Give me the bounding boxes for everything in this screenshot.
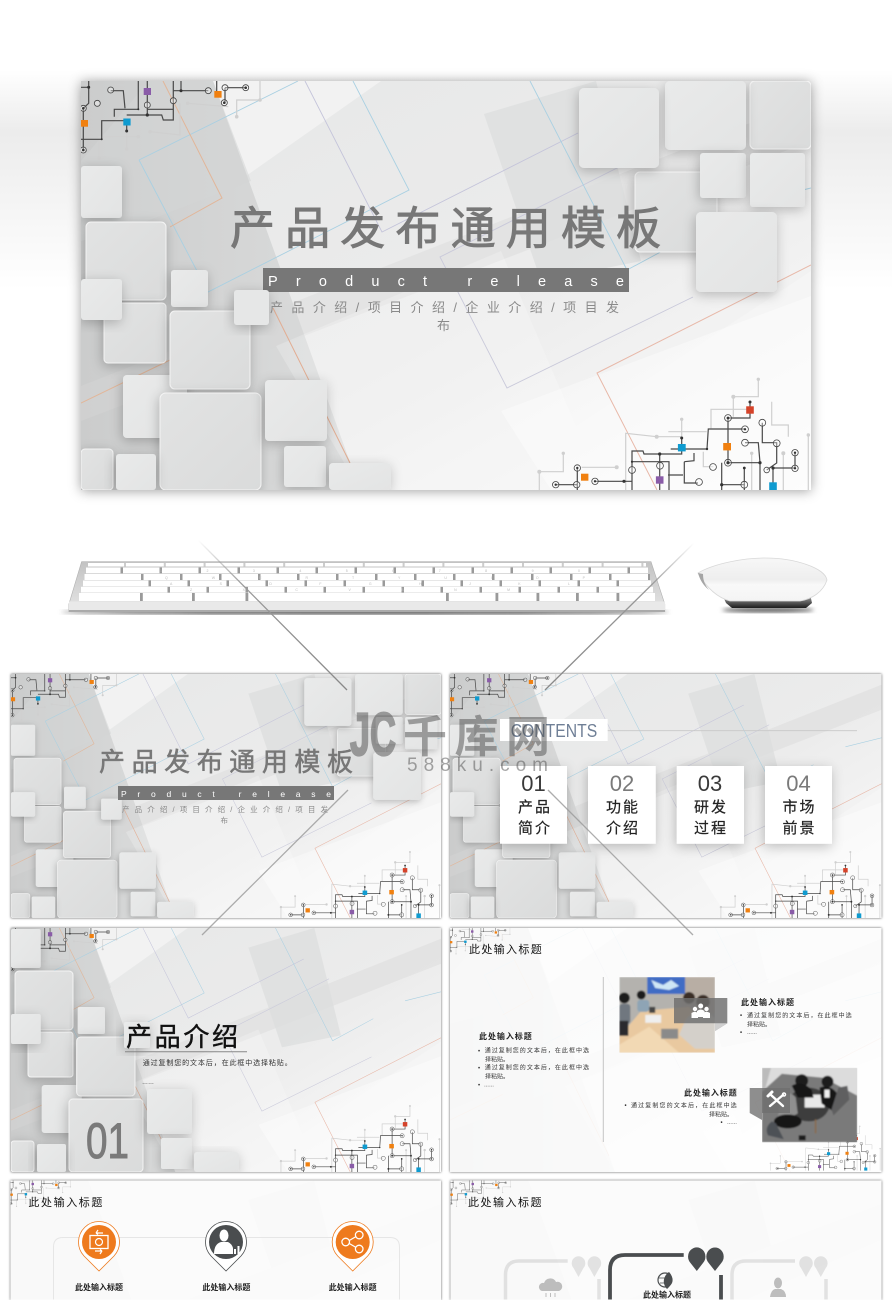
left text block: • [478,1049,480,1055]
key legends [160,569,586,592]
panel: main slide [80,81,811,490]
key legends: A S D F G H J K L [170,582,570,586]
left text block: 通过复制您的文本后，在此框中选 [485,1064,589,1072]
right lower text block [624,1088,737,1126]
key legends: 1 2 3 4 5 6 7 8 9 0 [160,569,580,573]
keyboard [61,562,669,614]
title: 产品发布通用模板 [230,203,661,254]
card 04: 04 [786,771,811,796]
pin: orange money [78,1222,120,1271]
subtitle bar: Product release [268,274,624,290]
panel: slide 6 three frames [450,1180,882,1300]
slide 1 description: 布 [220,815,228,825]
left text block [478,1031,589,1089]
card 02: 功能 [606,799,640,816]
mouse [698,558,827,613]
card 03: 过程 [694,820,728,837]
card 01: 01 [521,771,546,796]
slide 1 description [122,804,328,825]
right lower text block: • [624,1104,627,1110]
watermark [350,701,550,776]
big number 01: 01 [86,1113,129,1169]
photo: overhead meeting [762,1068,858,1142]
pin labels [75,1282,377,1292]
section description: …… [142,1079,154,1086]
card 04: 前景 [782,820,817,837]
center frame [610,1247,724,1300]
right top text block: 此处输入标题 [741,997,794,1007]
center label: 此处输入标题 [643,1290,691,1300]
pin: dark person [206,1222,246,1271]
section heading: 产品介绍 [126,1022,238,1052]
card 02 [588,766,656,844]
contents heading [500,719,857,741]
card 01: 产品 [518,799,552,816]
card 02: 02 [610,771,634,796]
left text block: • [478,1066,480,1072]
description text: 布 [437,318,450,333]
left faded frame [506,1256,601,1300]
left text block: …… [484,1082,494,1088]
right lower text block: …… [727,1120,737,1126]
left text block: 择粘贴。 [485,1072,509,1080]
right lower text block: • [720,1120,723,1126]
right top text block: 通过复制您的文本后，在此框中选 [747,1012,852,1020]
card 03: 研发 [694,799,728,816]
slide 1 subtitle bar: Product release [121,789,331,799]
right top text block: • [740,1030,742,1036]
slide 4 title: 此处输入标题 [469,942,542,956]
subtitle bar [263,268,629,292]
tile overlapping subtitle [234,290,269,325]
right lower text block: 通过复制您的文本后，在此框中选 [631,1102,737,1110]
pin labels: 此处输入标题 [75,1282,123,1292]
slide 6 title: 此处输入标题 [468,1195,542,1209]
card 04 [765,766,832,844]
panel: slide 4 three text blocks [450,928,882,1172]
panel: slide 2 contents [450,674,882,918]
panel: slide 3 section title [11,928,441,1172]
icon: leaf globe [658,1272,672,1289]
slide 3 tiles [11,928,244,1172]
slide 1 description: 产品介绍/项目介绍/企业介绍/项目发 [122,804,328,814]
right top text block: …… [747,1030,757,1036]
panel: slide 5 three pins [10,1180,441,1300]
rounded outline [54,1238,400,1300]
right top text block [740,997,852,1036]
pin: orange share [332,1222,373,1271]
divider [602,977,604,1142]
contents heading: CONTENTS [511,720,597,741]
right top text block: • [740,1014,742,1020]
photo: meeting room [619,977,715,1053]
key legends: Q W E R T Y U I O P [165,576,586,580]
icon: cloud [539,1278,562,1297]
pin labels: 此处输入标题 [202,1282,250,1292]
card 01 [500,766,567,844]
watermark: JC [350,701,396,768]
pin labels: 此处输入标题 [329,1282,377,1292]
card 03: 03 [698,771,722,796]
right top text block: 择粘贴。 [747,1020,771,1028]
arrow lines [198,540,694,935]
card 01: 简介 [518,820,552,837]
slide 1 title: 产品发布通用模板 [99,747,353,777]
card 03 [677,766,744,844]
description text [270,300,619,333]
card 04: 市场 [782,799,817,816]
slide 5 title: 此处输入标题 [28,1195,102,1209]
key legends: Z X C V B N M [190,588,510,592]
slide 1 subtitle bar [118,786,334,800]
section description [142,1058,292,1086]
left text block: 择粘贴。 [485,1056,509,1064]
icon tab: team [674,998,727,1031]
icon: person [770,1278,786,1297]
left text block: 此处输入标题 [479,1031,532,1041]
card 02: 介绍 [606,820,640,837]
watermark: 588ku.com [407,755,548,776]
watermark: 千库网 [403,713,550,762]
section description: 通过复制您的文本后，在此框中选择粘贴。 [143,1058,292,1067]
panel: slide 1 thumbnail [11,674,441,918]
page top gradient [0,70,892,290]
icon tab: tools [750,1088,790,1120]
right lower text block: 此处输入标题 [684,1088,737,1098]
right lower text block: 择粘贴。 [709,1110,733,1118]
left text block: • [478,1083,480,1089]
left text block: 通过复制您的文本后，在此框中选 [485,1046,589,1054]
description text: 产品介绍/项目介绍/企业介绍/项目发 [270,300,619,315]
right faded frame [732,1256,828,1300]
